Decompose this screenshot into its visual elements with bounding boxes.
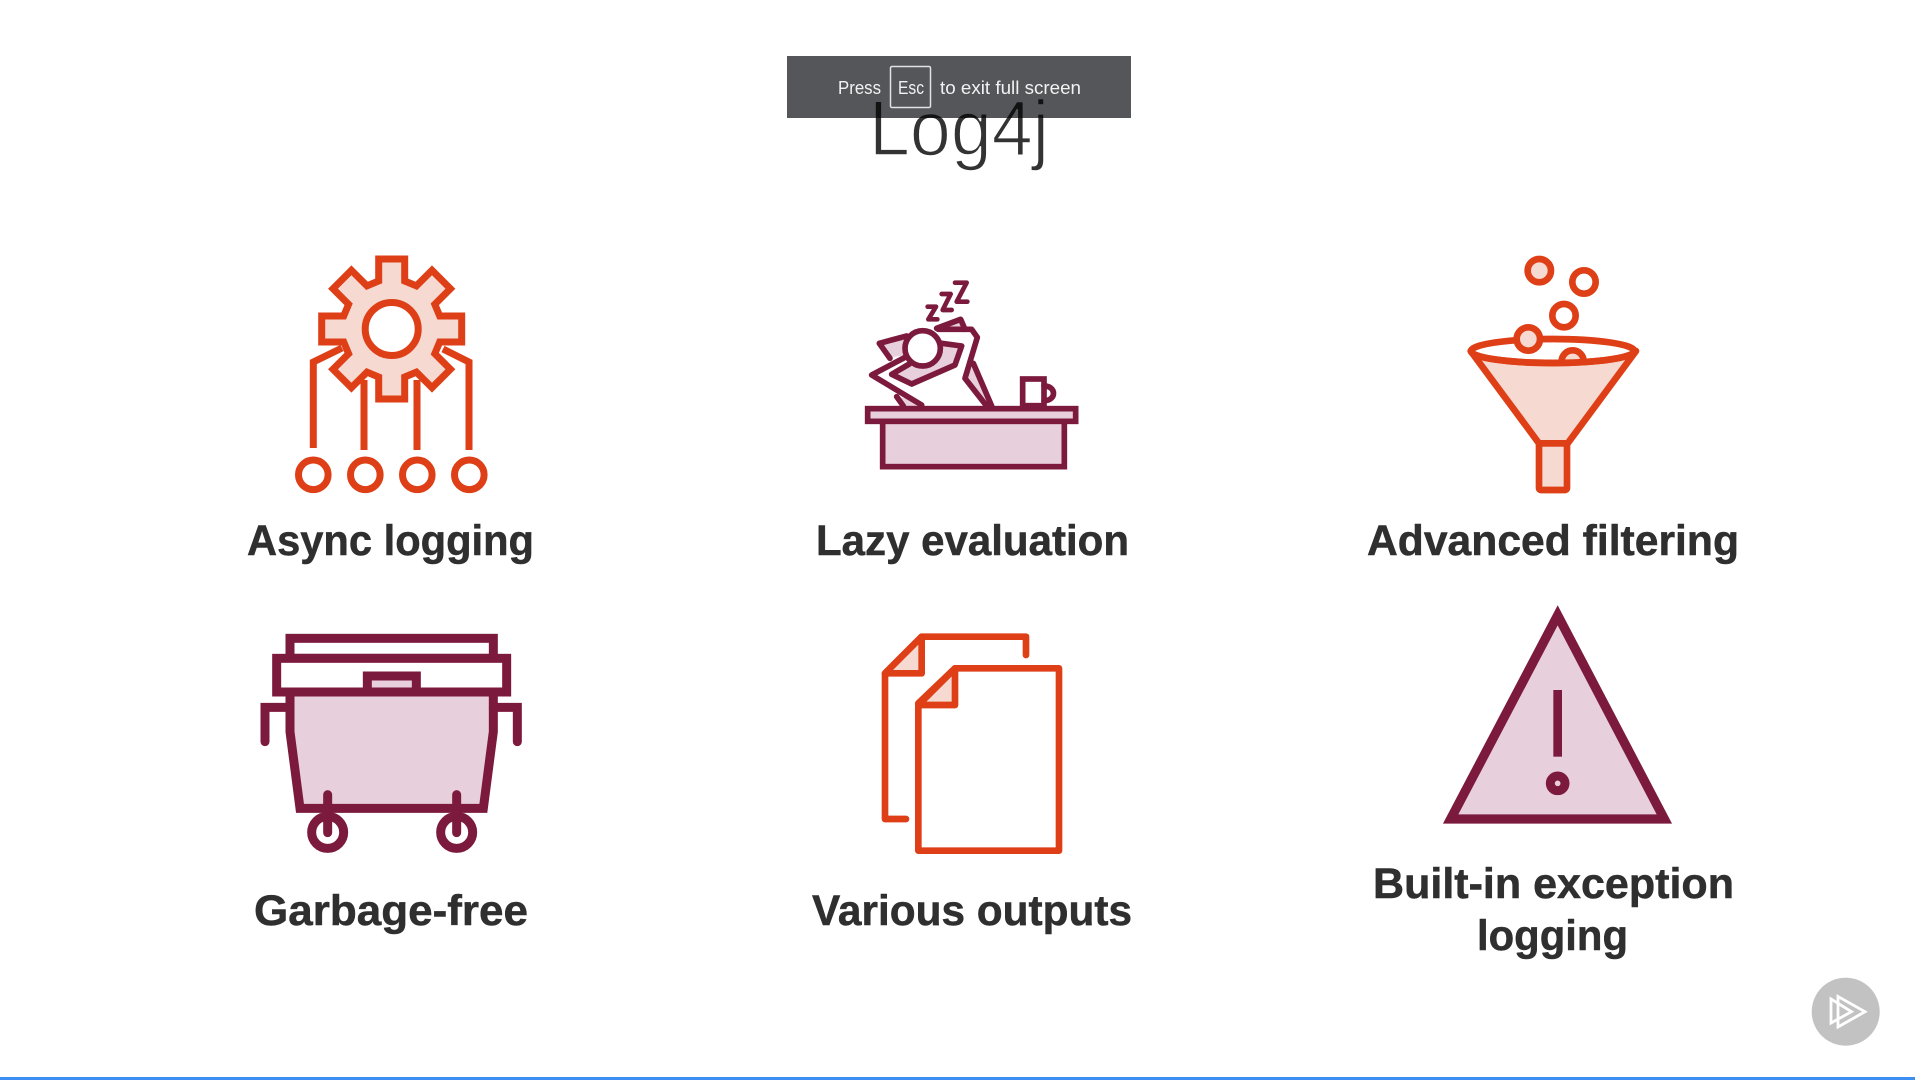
full screen notice bar: to exit full screen bbox=[940, 78, 1081, 98]
icon: warning triangle bbox=[1451, 615, 1664, 819]
title: Log4j bbox=[869, 84, 1049, 172]
progress bar bbox=[0, 1077, 1915, 1080]
icon: funnel with bubbles bbox=[1471, 259, 1636, 490]
icon: two documents bbox=[885, 637, 1059, 851]
label: async logging: Async logging bbox=[247, 517, 534, 565]
label: built-in exception logging: Built-in exception bbox=[1373, 860, 1734, 908]
label: garbage-free: Garbage-free bbox=[254, 887, 528, 935]
label: lazy evaluation: Lazy evaluation bbox=[816, 517, 1129, 565]
icon: play logo button bbox=[1812, 978, 1880, 1046]
full screen notice bar bbox=[787, 56, 1131, 118]
icon: garbage bin on wheels bbox=[265, 638, 517, 848]
label: built-in exception logging: logging bbox=[1477, 912, 1628, 960]
full screen notice bar: Esc bbox=[898, 78, 924, 98]
full screen notice bar: Press bbox=[838, 78, 881, 98]
label: various outputs: Various outputs bbox=[812, 887, 1132, 935]
label: built-in exception logging bbox=[1373, 860, 1734, 960]
icon: person sleeping at desk bbox=[868, 283, 1076, 467]
icon: gear with connections bbox=[298, 259, 484, 490]
label: advanced filtering: Advanced filtering bbox=[1367, 517, 1739, 565]
